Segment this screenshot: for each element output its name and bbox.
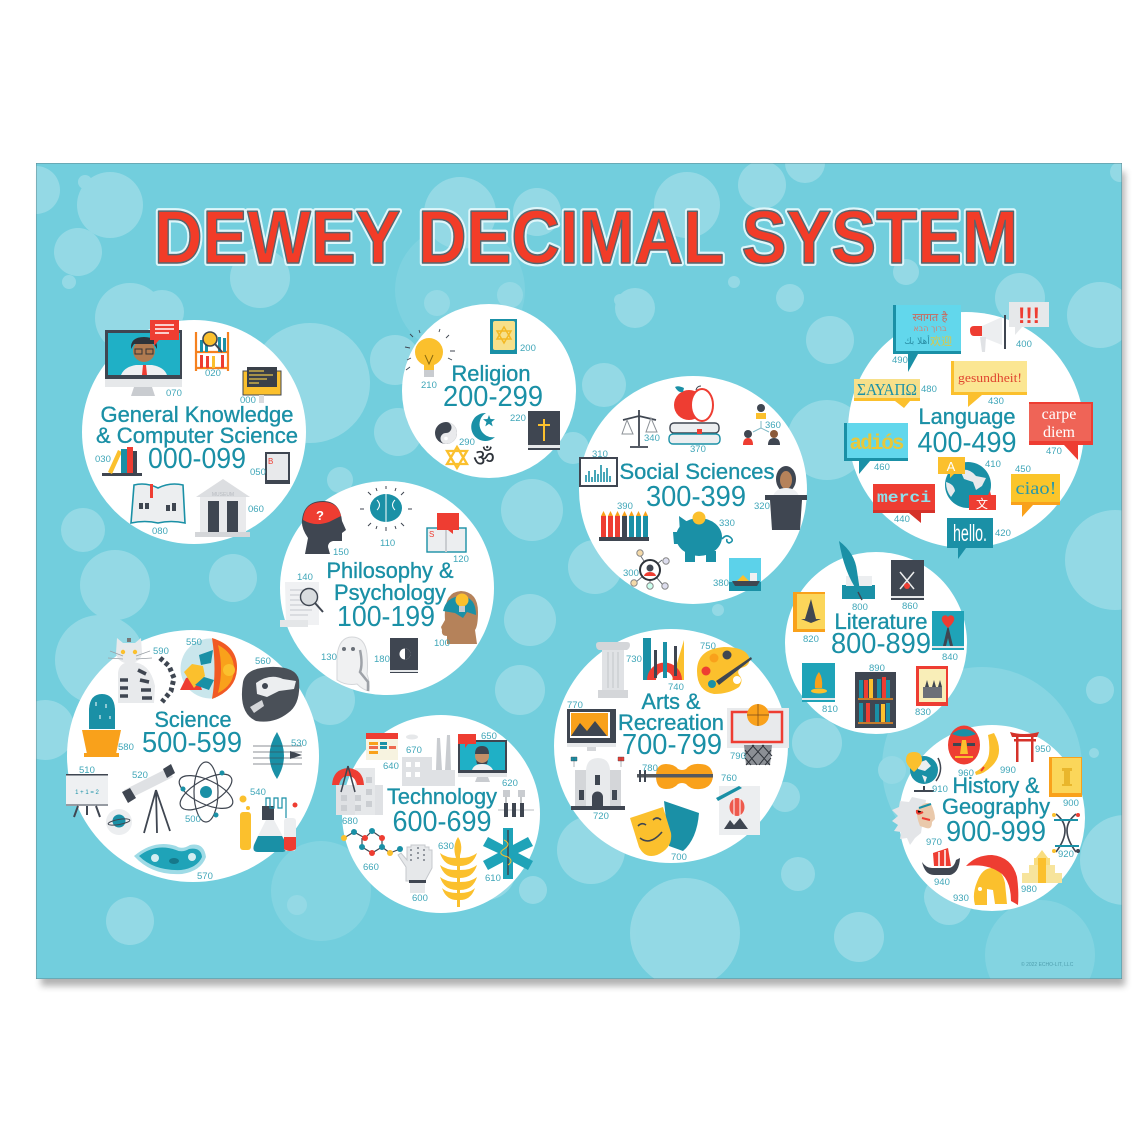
icon: wheat 630 xyxy=(438,837,477,907)
heading: social sciences xyxy=(620,459,774,513)
icon: translation globe 410: 410 xyxy=(985,459,1001,470)
icon: quill and ink 800 xyxy=(839,541,875,613)
bubble: gesundheit 430: gesundheit! xyxy=(958,370,1022,385)
icon: paper and magnifier 140 xyxy=(280,572,323,627)
bubble: welcome 490 xyxy=(892,305,961,372)
icon: yin yang xyxy=(435,422,457,444)
icon: scales 340: 340 xyxy=(644,433,660,444)
heading: general knowledge xyxy=(96,402,298,475)
panel: language xyxy=(844,302,1093,559)
icon: headdress 970: 970 xyxy=(926,837,942,848)
heading: science xyxy=(142,707,242,759)
bubble: carpe diem 470: 470 xyxy=(1046,446,1062,457)
heading: technology: Technology xyxy=(387,784,497,809)
icon: tablet 050 xyxy=(250,452,290,484)
icon: telescope 520 xyxy=(122,764,175,833)
heading: arts and recreation xyxy=(618,689,724,761)
title: DEWEY DECIMAL SYSTEM xyxy=(154,195,1018,279)
icon: presentation board 510 xyxy=(66,765,108,817)
icon: ghost 130: 130 xyxy=(321,652,337,663)
icon: speaker at podium 320: 320 xyxy=(754,501,770,512)
panel: science xyxy=(66,630,319,882)
icon: book with bubble 120: 120 xyxy=(453,554,469,565)
icon: history book 900 xyxy=(1049,757,1082,809)
poster background with bokeh xyxy=(12,143,1140,1010)
icon: planet xyxy=(106,809,132,835)
icon: robot hand 600 xyxy=(398,845,432,904)
icon: balloon poster 760: 760 xyxy=(721,773,737,784)
icon: monitor 070 xyxy=(105,320,182,399)
heading: religion: 200-299 xyxy=(443,381,543,413)
icon: head with bulb 100 xyxy=(434,591,478,649)
panel circle xyxy=(280,481,494,695)
icon: palette 750 xyxy=(697,641,752,694)
icon: column 730: 730 xyxy=(626,654,642,665)
bubble: carpe diem 470: diem xyxy=(1043,424,1076,441)
icon: column 730 xyxy=(596,642,642,698)
icon: network 300: 300 xyxy=(623,568,639,579)
icon: castle book 830 xyxy=(915,666,948,718)
icon: factory 670: 670 xyxy=(406,745,422,756)
icon: lens 530 xyxy=(253,732,307,779)
panel circle xyxy=(402,304,576,478)
bubble: welcome 490: 欢迎 xyxy=(930,334,952,348)
icon: earth core 550 xyxy=(180,637,237,699)
heading: literature: Literature xyxy=(834,609,928,634)
icon: monitor landscape 770 xyxy=(567,700,616,751)
bubble: ciao 450 xyxy=(1011,464,1060,517)
icon: crescent and star 290: 290 xyxy=(459,437,475,448)
bubble: ciao 450: ciao! xyxy=(1016,478,1056,498)
icon: headdress 970 xyxy=(892,797,942,848)
panel circle xyxy=(554,629,788,863)
icon: head with question 150 xyxy=(302,501,349,558)
heading: social sciences: Social Sciences xyxy=(620,459,774,484)
icon: witch hat book 820 xyxy=(793,592,825,645)
icon: open book 080: 080 xyxy=(152,526,168,537)
icon: castle book 830: 830 xyxy=(915,707,931,718)
icon: piggy bank 330: 330 xyxy=(719,518,735,529)
icon: basketball hoop 790 xyxy=(727,704,789,765)
icon: star of david xyxy=(447,447,467,468)
icon: piggy bank 330 xyxy=(673,512,735,562)
bubble: exclamation 400: !!! xyxy=(1018,303,1040,328)
icon: eiffel book 840 xyxy=(932,611,964,663)
panel circle xyxy=(785,552,967,734)
icon: dark book 860: 860 xyxy=(902,601,918,612)
icon: viking ship 940 xyxy=(922,848,960,888)
icon: atom 500 xyxy=(175,762,237,825)
icon: books 030: 030 xyxy=(95,454,111,465)
panel: history and geography xyxy=(892,725,1085,911)
icon: witch hat book 820: 820 xyxy=(803,634,819,645)
icon: monitor man 650: 650 xyxy=(481,731,497,742)
icon: museum 060 xyxy=(195,479,264,537)
heading: technology: 600-699 xyxy=(392,806,492,838)
icon: people 360: 360 xyxy=(765,420,781,431)
icon: bible 220 xyxy=(510,411,560,450)
icon: tribal mask 960: 960 xyxy=(958,768,974,779)
icon: history book 900: 900 xyxy=(1063,798,1079,809)
icon: medical star 610: 610 xyxy=(485,873,501,884)
heading: history and geography: 900-999 xyxy=(946,816,1046,848)
panel: arts and recreation xyxy=(554,629,789,863)
icon: violin 780: 780 xyxy=(642,763,658,774)
icon: book with yin yang 180: 180 xyxy=(374,654,390,665)
icon: palace 720: 720 xyxy=(593,811,609,822)
heading: philosophy: Philosophy & xyxy=(326,558,454,583)
heading: language: 400-499 xyxy=(918,427,1016,459)
bubble: greek 480: ΣΑΥΑΠΩ xyxy=(857,380,917,399)
bubble: welcome 490: أهلا بك xyxy=(904,335,930,347)
icon: calendar 640: 640 xyxy=(383,761,399,772)
bubble: exclamation 400 xyxy=(1009,302,1049,350)
icon: people 360 xyxy=(743,404,781,445)
icon: museum 060: 060 xyxy=(248,504,264,515)
icon: book with star 200: 200 xyxy=(520,343,536,354)
panel: philosophy and psychology xyxy=(280,481,494,695)
icon: book with yin yang 180 xyxy=(374,638,418,673)
icon: lab flasks 540: 540 xyxy=(250,787,266,798)
icon: cat 590 xyxy=(108,638,174,703)
heading: religion: Religion xyxy=(452,361,530,386)
heading: philosophy xyxy=(326,558,454,633)
icon: rocket book 810: 810 xyxy=(822,704,838,715)
icon: open book 080 xyxy=(131,484,185,537)
panel: literature xyxy=(785,541,967,734)
bubble: gesundheit 430: 430 xyxy=(988,396,1004,407)
bubble: gesundheit 430 xyxy=(951,361,1027,407)
copyright: © 2022 ECHO-LIT, LLC xyxy=(1021,961,1074,968)
icon: candles 390 xyxy=(599,501,649,541)
icon: equipment 620: 620 xyxy=(502,778,518,789)
icon: translation globe 410 xyxy=(938,457,1001,511)
panel circle xyxy=(579,376,807,604)
icon: rocket book 810 xyxy=(802,663,838,715)
icon: head with question 150: ? xyxy=(316,508,324,523)
heading: philosophy: 100-199 xyxy=(337,601,435,633)
icon: scales 340 xyxy=(622,410,660,447)
panel circle xyxy=(848,312,1084,548)
icon: violin 780 xyxy=(637,763,713,789)
bubble: welcome 490: 490 xyxy=(892,355,908,366)
icon: dark book 860 xyxy=(891,560,924,612)
icon: bookcase 890: 890 xyxy=(869,663,885,674)
heading: social sciences: 300-399 xyxy=(646,481,746,513)
icon: lens 530: 530 xyxy=(291,738,307,749)
icon: presentation board 510: 1 + 1 = 2 xyxy=(75,790,100,796)
icon: speaker at podium 320 xyxy=(754,466,807,530)
heading: literature xyxy=(831,609,931,660)
icon: robot hand 600: 600 xyxy=(412,893,428,904)
icon: lab flasks 540 xyxy=(240,787,298,852)
heading: technology xyxy=(387,784,497,838)
icon: cactus 580: 580 xyxy=(118,742,134,753)
bubble: carpe diem 470: carpe xyxy=(1042,406,1076,423)
icon: cat 590: 590 xyxy=(153,646,169,657)
icon: cargo ship 380 xyxy=(713,558,761,591)
icon: book with bubble 120: S xyxy=(429,530,434,539)
heading: arts and recreation: Arts & xyxy=(642,689,701,714)
icon: chart 310 xyxy=(580,449,617,486)
icon: eiffel book 840: 840 xyxy=(942,652,958,663)
icon: telescope 520: 520 xyxy=(132,770,148,781)
icon: theater masks 700: 700 xyxy=(671,852,687,863)
bubble: merci 440: merci xyxy=(877,489,931,507)
bubble: carpe diem 470 xyxy=(1029,402,1093,460)
icon: pyramid 980: 980 xyxy=(1021,884,1037,895)
icon: palace 720 xyxy=(571,757,625,822)
icon: bible 220: 220 xyxy=(510,413,526,424)
heading: language: Language xyxy=(918,404,1016,429)
icon: earth core 550: 550 xyxy=(186,637,202,648)
icon: books 030 xyxy=(95,447,142,476)
panel circle xyxy=(67,630,319,882)
heading: general knowledge: & Computer Science xyxy=(96,423,298,448)
icon: presentation board 510: 510 xyxy=(79,765,95,776)
icon: network 300 xyxy=(623,550,669,589)
icon: basketball hoop 790: 790 xyxy=(730,751,746,762)
icon: globe and pin 910: 910 xyxy=(932,784,948,795)
bubble: merci 440 xyxy=(873,484,935,525)
icon: dna 920: 920 xyxy=(1058,849,1074,860)
panel: general knowledge and computer science xyxy=(82,320,306,544)
icon: apple and books 370 xyxy=(669,386,720,455)
icon: monitor landscape 770: 770 xyxy=(567,700,583,711)
icon: molecule 660 xyxy=(341,828,403,873)
heading: arts and recreation: 700-799 xyxy=(622,729,722,761)
icon: tribal mask 960 xyxy=(948,726,980,779)
icon: pyramid 980 xyxy=(1021,850,1062,895)
icon: ghost 130 xyxy=(321,637,369,691)
icon: spartan helmet 930: 930 xyxy=(953,893,969,904)
icon: drafting tools 740 xyxy=(643,638,684,693)
icon: calendar 640 xyxy=(366,733,399,772)
icon: light bulb 210 xyxy=(405,329,455,391)
heading: general knowledge: General Knowledge xyxy=(100,402,294,427)
panel circle xyxy=(82,320,306,544)
icon: monitor 070: 070 xyxy=(166,388,182,399)
icon: quill and ink 800: 800 xyxy=(852,602,868,613)
heading: history and geography xyxy=(942,773,1050,848)
icon: translation globe 410: A xyxy=(947,459,956,474)
heading: history and geography: Geography xyxy=(942,794,1050,819)
heading: science: 500-599 xyxy=(142,727,242,759)
icon: torii gate 950: 950 xyxy=(1035,744,1051,755)
icon: molecule 660: 660 xyxy=(363,862,379,873)
panel circle xyxy=(342,715,540,913)
icon: tablet 050: 050 xyxy=(250,467,266,478)
icon: tablet 050: B xyxy=(268,457,273,466)
icon: equipment 620 xyxy=(498,778,534,817)
icon: museum 060: MUSEUM xyxy=(212,492,234,498)
heading: language xyxy=(918,404,1016,459)
icon: light bulb 210: 210 xyxy=(421,380,437,391)
icon: brain 110 xyxy=(360,486,412,549)
bubble: adios 460 xyxy=(844,423,908,474)
panel circle xyxy=(899,725,1085,911)
icon: fossil 560 xyxy=(242,656,299,722)
icon: brain 110: 110 xyxy=(380,538,395,549)
heading: philosophy: Psychology xyxy=(334,580,446,605)
icon: apple and books 370: 370 xyxy=(690,444,706,455)
bubble: hello 420: 420 xyxy=(995,528,1011,539)
icon: om symbol: ॐ xyxy=(473,444,495,472)
icon: building and protractor 680: 680 xyxy=(342,816,358,827)
panel: religion xyxy=(402,304,576,478)
icon: medical star 610 xyxy=(483,828,533,884)
bubble: merci 440: 440 xyxy=(894,514,910,525)
heading: history and geography: History & xyxy=(952,773,1040,798)
bubble: ciao 450: 450 xyxy=(1015,464,1031,475)
icon: bookshelf 020: 020 xyxy=(205,368,221,379)
bubble: hello 420: hello. xyxy=(953,520,987,546)
bubble: adios 460: adiós xyxy=(850,433,904,456)
heading: science: Science xyxy=(154,707,232,732)
heading: arts and recreation: Recreation xyxy=(618,710,724,735)
icon: cactus 580 xyxy=(82,694,134,757)
icon: boomerang 990 xyxy=(975,733,1016,776)
icon: book with star 200 xyxy=(490,319,536,354)
icon: crescent and star 290 xyxy=(459,413,495,448)
icon: boomerang 990: 990 xyxy=(1000,765,1016,776)
icon: laptop code 000: 000 xyxy=(240,395,256,406)
icon: factory 670 xyxy=(402,734,455,786)
icon: chart 310: 310 xyxy=(592,449,608,460)
icon: head with question 150: 150 xyxy=(333,547,349,558)
icon: paper and magnifier 140: 140 xyxy=(297,572,313,583)
bubble: greek 480: 480 xyxy=(921,384,937,395)
icon: book with bubble 120 xyxy=(427,513,469,565)
icon: drafting tools 740: 740 xyxy=(668,682,684,693)
icon: paramecium 570 xyxy=(134,844,213,882)
bubble: welcome 490: ברוך הבא xyxy=(913,324,947,333)
icon: head with bulb 100: 100 xyxy=(434,638,450,649)
icon: globe and pin 910 xyxy=(906,752,948,795)
icon: torii gate 950 xyxy=(1010,732,1051,762)
icon: bookcase 890 xyxy=(855,663,896,728)
icon: balloon poster 760 xyxy=(716,773,760,835)
icon: monitor man 650 xyxy=(458,731,507,782)
icon: palette 750: 750 xyxy=(700,641,716,652)
bubble: adios 460: 460 xyxy=(874,462,890,473)
icon: building and protractor 680 xyxy=(332,766,383,827)
icon: atom 500: 500 xyxy=(185,814,201,825)
icon: wheat 630: 630 xyxy=(438,841,454,852)
icon: cargo ship 380: 380 xyxy=(713,578,729,589)
bubble: greek 480 xyxy=(854,379,937,408)
panel: social sciences xyxy=(579,376,807,604)
bubble: welcome 490: स्वागत है xyxy=(912,311,948,324)
heading: religion xyxy=(443,361,543,413)
icon: fossil 560: 560 xyxy=(255,656,271,667)
bubble: exclamation 400: 400 xyxy=(1016,339,1032,350)
icon: megaphone xyxy=(970,315,1006,352)
title: DEWEY DECIMAL SYSTEM xyxy=(154,195,1018,279)
icon: viking ship 940: 940 xyxy=(934,877,950,888)
poster shadow xyxy=(41,172,1125,986)
heading: general knowledge: 000-099 xyxy=(148,443,246,475)
icon: spartan helmet 930 xyxy=(953,855,1018,905)
icon: dna 920 xyxy=(1052,813,1080,860)
icon: paramecium 570: 570 xyxy=(197,871,213,882)
icon: bookshelf 020 xyxy=(196,332,228,379)
icon: theater masks 700 xyxy=(630,801,699,863)
heading: literature: 800-899 xyxy=(831,628,931,660)
panel: technology xyxy=(332,715,540,913)
icon: laptop code 000 xyxy=(240,367,281,406)
bubble: hello 420 xyxy=(947,518,1011,559)
icon: translation globe 410: 文 xyxy=(976,496,988,511)
icon: candles 390: 390 xyxy=(617,501,633,512)
